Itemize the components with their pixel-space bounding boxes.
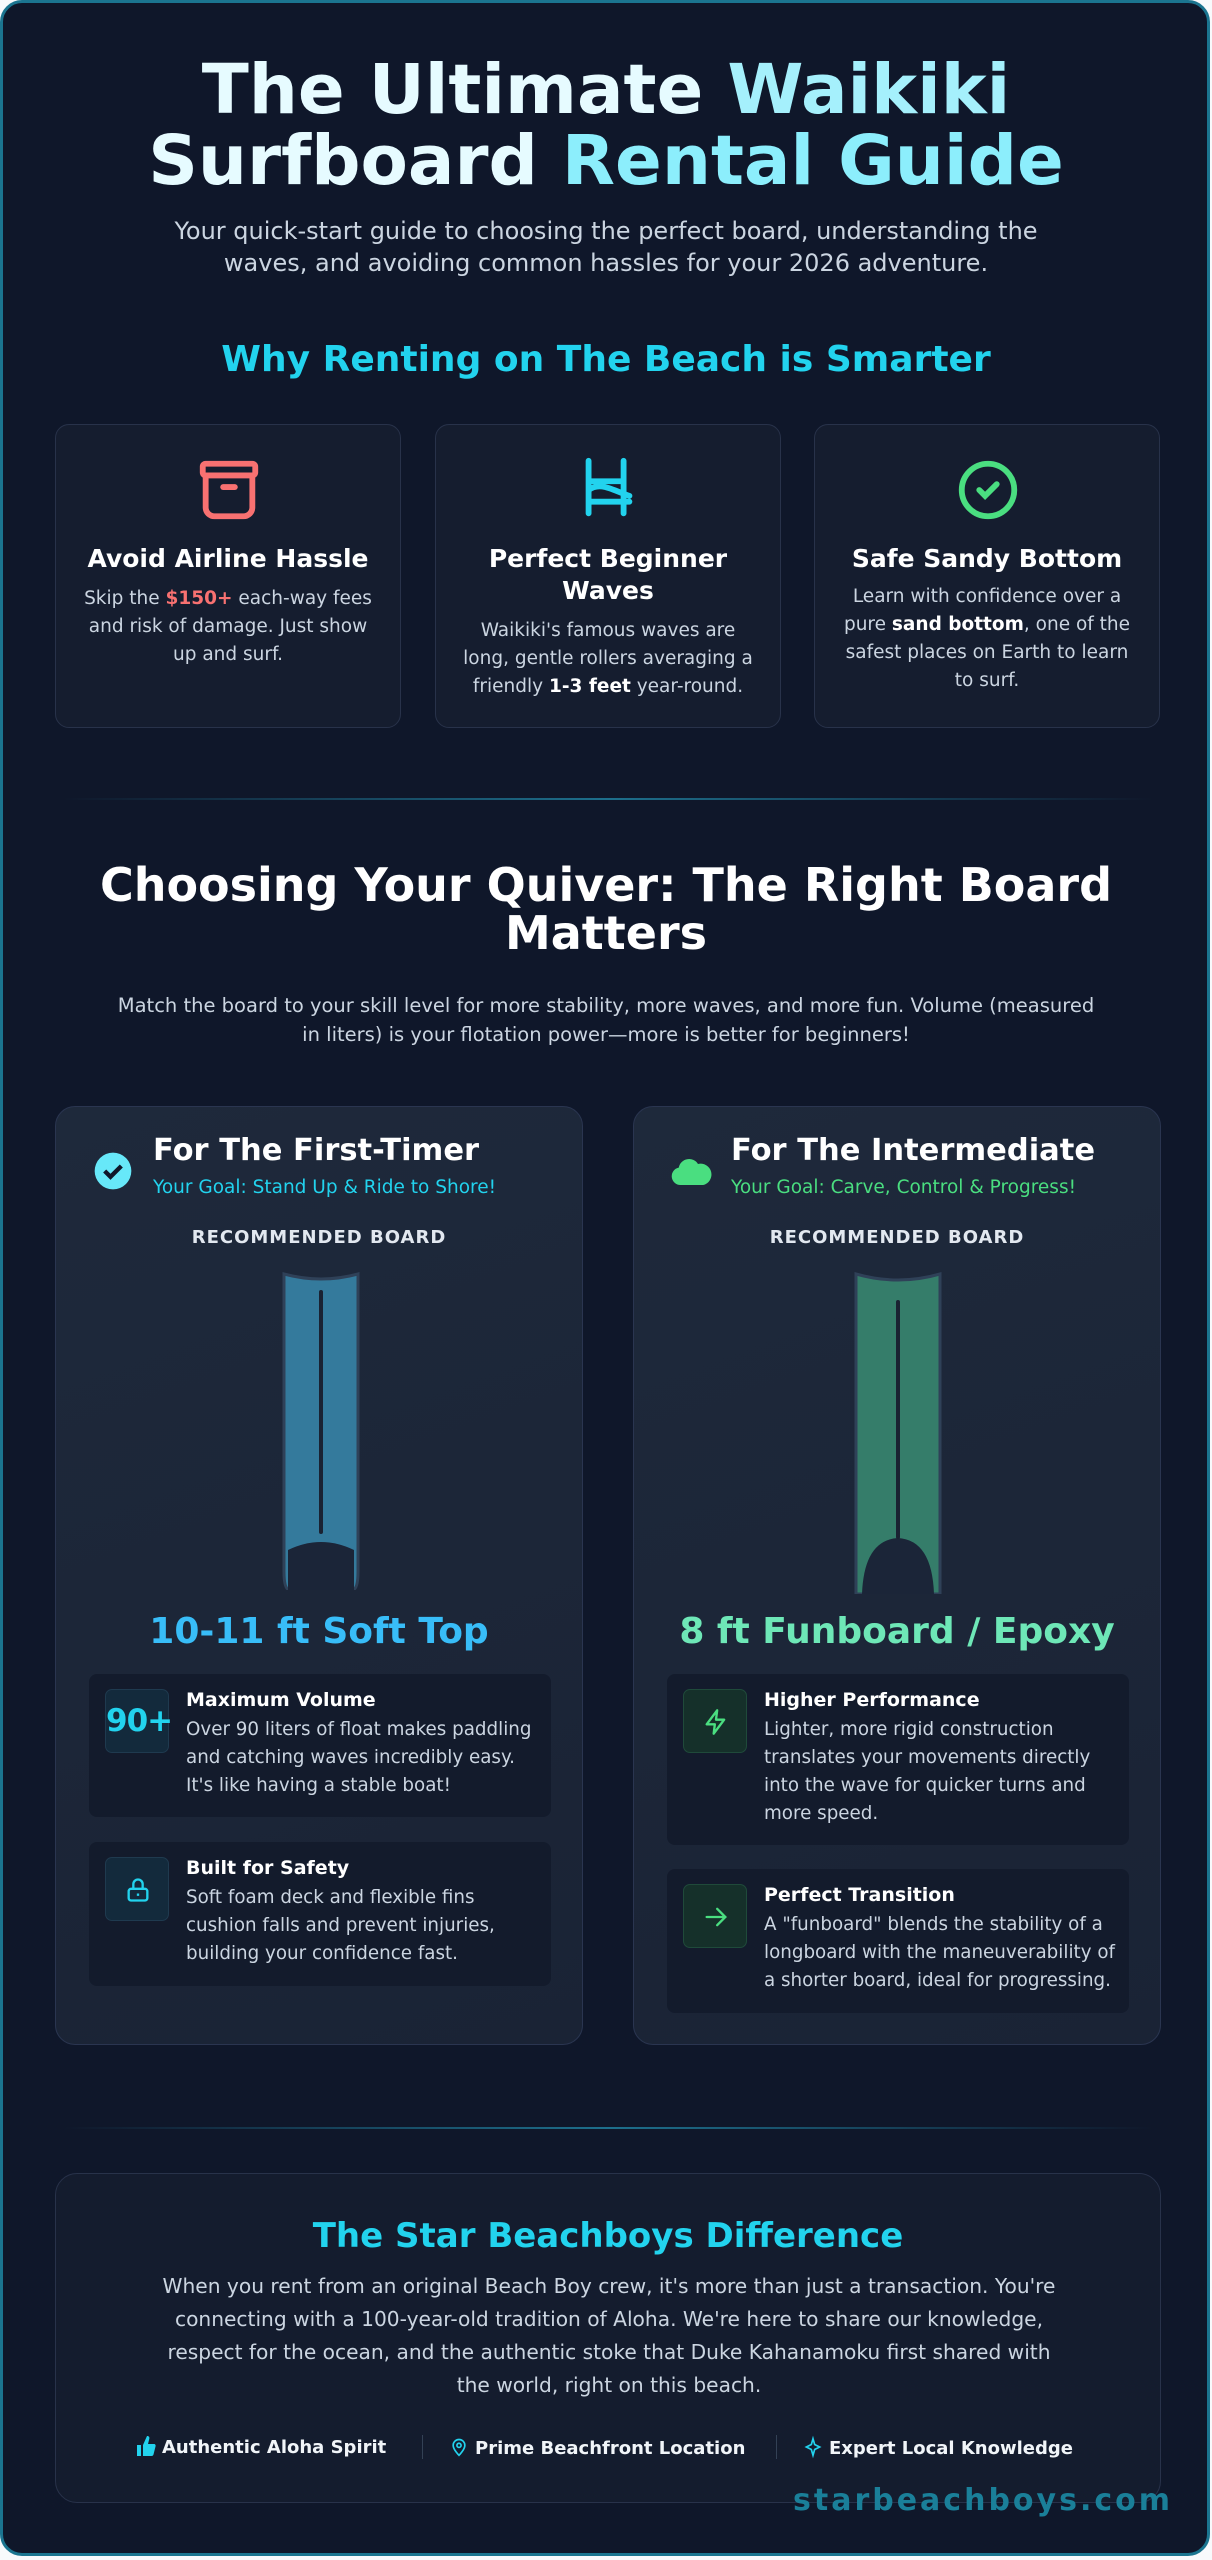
heading: why renting: Why Renting on The Beach is Smarter xyxy=(221,339,991,380)
card: waves: Waikiki's famous waves are long, gentle rollers averaging a friendly 1-3 feet year-round. xyxy=(463,620,753,697)
title: The Ultimate Waikiki xyxy=(202,50,1010,130)
feature: safety: Soft foam deck and flexible fins cushion falls and prevent injuries, building your confidence fast. xyxy=(186,1887,495,1964)
panel: intermediate: RECOMMENDED BOARD xyxy=(770,1227,1024,1248)
icon: cloud xyxy=(672,1159,712,1185)
feature: performance xyxy=(667,1674,1129,1845)
title xyxy=(148,50,1064,201)
feature: performance: Lighter, more rigid construction translates your movements directly into the wave for quicker turns and more speed. xyxy=(764,1719,1090,1824)
heading: choosing quiver xyxy=(100,858,1112,960)
icon: waves xyxy=(586,458,632,516)
title: Surfboard Rental Guide xyxy=(148,121,1064,201)
features row xyxy=(137,2435,1073,2459)
website url: starbeachboys.com xyxy=(793,2483,1173,2518)
body text: When you rent from an original Beach Boy crew, it's more than just a transaction. You're connecting with a 100-year-old tradition of Aloha. We're here to share our knowledge, respect for the ocean, and the authentic stoke that Duke Kahanamoku first shared with the world, right on this beach. xyxy=(163,2274,1055,2397)
card: sandy xyxy=(814,424,1160,728)
card: airline: Skip the $150+ each-way fees and risk of damage. Just show up and surf. xyxy=(84,588,372,665)
card: sandy: Safe Sandy Bottom xyxy=(852,544,1122,573)
card: waves: Perfect Beginner xyxy=(489,544,727,573)
subtitle: Your quick-start guide to choosing the perfect board, understanding the waves, and avoiding common hassles for your 2026 adventure. xyxy=(174,217,1038,277)
feature: max volume: Over 90 liters of float makes paddling and catching waves incredibly easy. It's like having a stable boat! xyxy=(186,1719,532,1796)
feature: transition: A "funboard" blends the stability of a longboard with the maneuverability of a shorter board, ideal for progressing. xyxy=(764,1914,1115,1991)
heading: choosing quiver: Matters xyxy=(505,906,707,960)
heading: The Star Beachboys Difference xyxy=(313,2216,903,2256)
item: location: Prime Beachfront Location xyxy=(475,2438,745,2459)
feature: safety: Built for Safety xyxy=(186,1857,349,1879)
panel: first-timer xyxy=(55,1106,583,2045)
panel: intermediate: For The Intermediate xyxy=(731,1133,1095,1168)
card: sandy: Learn with confidence over a pure sand bottom, one of the safest places on Earth to learn to surf. xyxy=(844,586,1130,691)
item: aloha: Authentic Aloha Spirit xyxy=(162,2437,386,2458)
icon: box xyxy=(200,460,258,520)
panel: star beachboys difference xyxy=(55,2173,1161,2503)
card: airline: Avoid Airline Hassle xyxy=(87,544,369,573)
panel: intermediate: 8 ft Funboard / Epoxy xyxy=(679,1611,1115,1652)
card: waves: Waves xyxy=(562,576,654,605)
feature: transition xyxy=(667,1869,1129,2013)
feature: max volume xyxy=(89,1674,551,1817)
panel: first-timer: RECOMMENDED BOARD xyxy=(192,1227,446,1248)
panel: first-timer: 10-11 ft Soft Top xyxy=(149,1611,489,1652)
feature: transition: Perfect Transition xyxy=(764,1884,955,1906)
feature: max volume: 90+ xyxy=(106,1703,172,1739)
panel: first-timer: For The First-Timer xyxy=(153,1133,479,1168)
icon: check circle xyxy=(958,460,1018,520)
board: funboard xyxy=(854,1272,942,1594)
panel: intermediate: Your Goal: Carve, Control & Progress! xyxy=(731,1177,1076,1198)
card: waves xyxy=(435,424,781,728)
feature: max volume: Maximum Volume xyxy=(186,1689,376,1711)
panel: intermediate xyxy=(633,1106,1161,2045)
heading: choosing quiver: Choosing Your Quiver: The Right Board xyxy=(100,858,1112,912)
board: soft top xyxy=(282,1272,360,1590)
item: knowledge: Expert Local Knowledge xyxy=(829,2438,1073,2459)
feature: performance: Higher Performance xyxy=(764,1689,980,1711)
quiver intro: Match the board to your skill level for more stability, more waves, and more fun. Volume (measured in liters) is your flotation power—more is better for beginners! xyxy=(118,994,1094,1046)
card: airline xyxy=(55,424,401,728)
feature: safety xyxy=(89,1842,551,1986)
panel: first-timer: Your Goal: Stand Up & Ride to Shore! xyxy=(153,1177,496,1198)
icon: check badge xyxy=(94,1152,132,1190)
